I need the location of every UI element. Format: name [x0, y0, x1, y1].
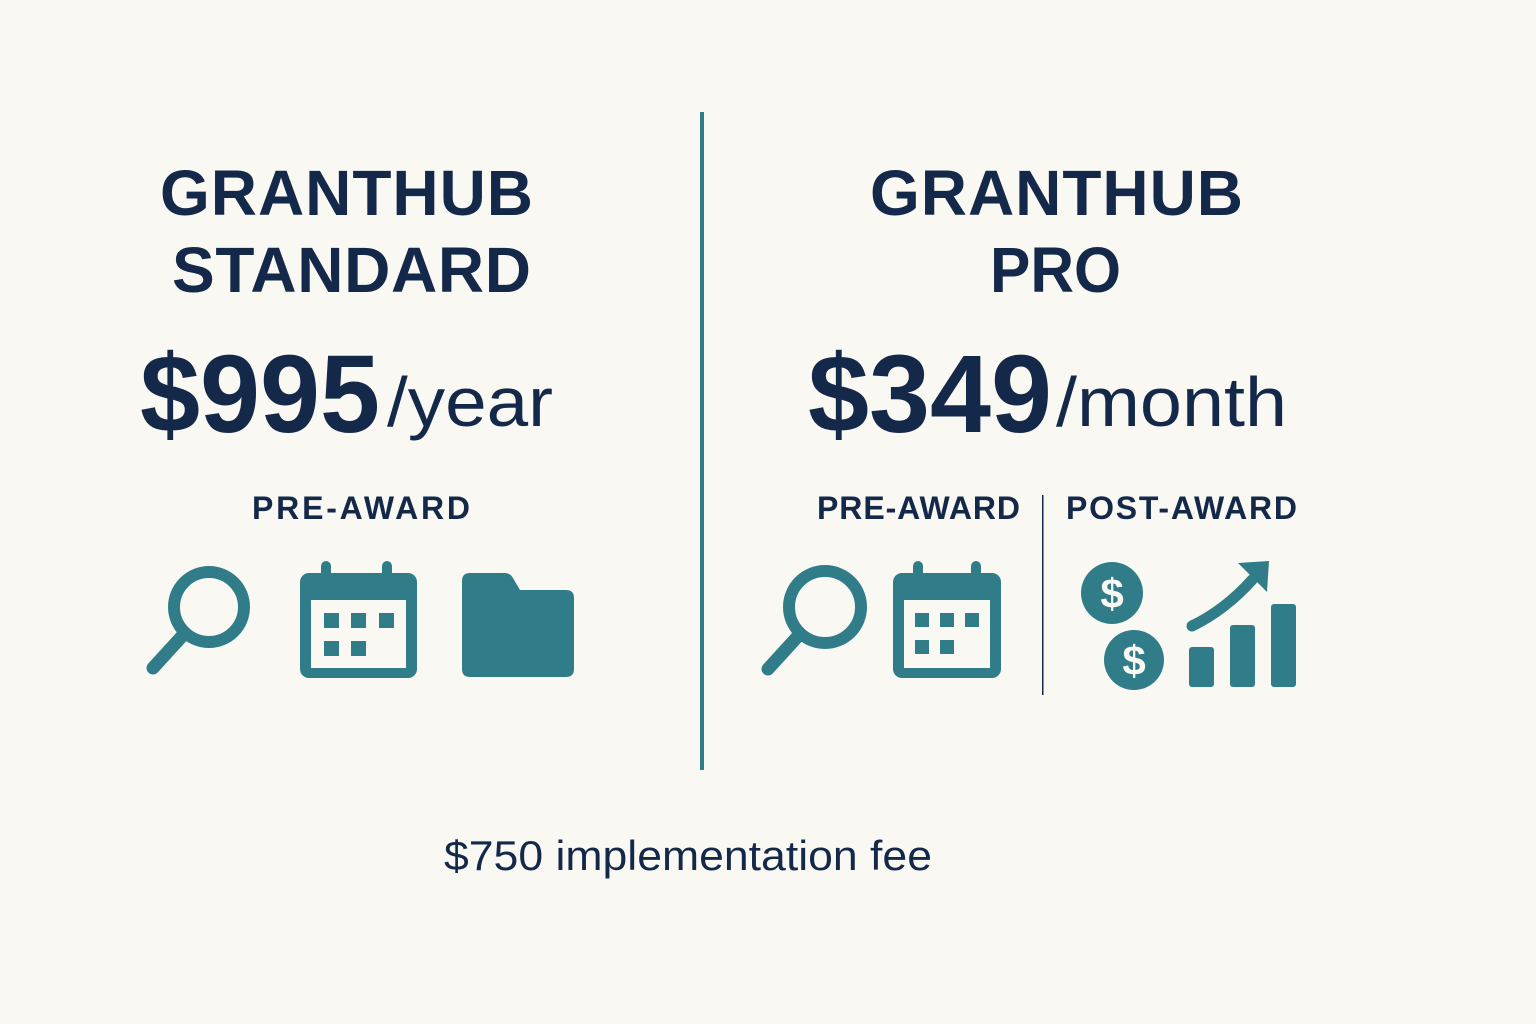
icon: magnifier: [153, 572, 244, 668]
price: standard: [140, 333, 553, 456]
label: pre-award pro: PRE-AWARD: [817, 490, 1020, 526]
icon: magnifier pro: [768, 571, 861, 669]
icon: folder: [462, 573, 574, 677]
footer: implementation fee: $750 implementation fee: [444, 832, 932, 879]
panel: pro plan: [768, 157, 1297, 695]
price: pro: $349: [808, 333, 1052, 456]
icon: coins: $: [1122, 637, 1146, 684]
price: standard: /year: [387, 363, 553, 441]
heading: standard title: [160, 157, 533, 306]
heading: pro title: GRANTHUB: [870, 157, 1243, 229]
icon: calendar: [300, 561, 417, 678]
price: pro: /month: [1056, 363, 1287, 441]
heading: standard title: GRANTHUB: [160, 157, 533, 229]
icon: calendar pro: [893, 561, 1001, 678]
price: pro: [808, 333, 1287, 456]
label: pre-award standard: PRE-AWARD: [252, 490, 470, 526]
label: post-award: POST-AWARD: [1066, 490, 1297, 526]
divider: main: [700, 112, 704, 770]
heading: standard title: STANDARD: [172, 234, 531, 306]
heading: pro title: [870, 157, 1243, 306]
heading: pro title: PRO: [990, 234, 1121, 306]
icon: coins: [1081, 562, 1164, 690]
icon: growth chart: [1189, 561, 1296, 687]
price: standard: $995: [140, 333, 380, 456]
icon: coins: $: [1100, 570, 1124, 617]
panel: standard plan: [140, 157, 574, 678]
